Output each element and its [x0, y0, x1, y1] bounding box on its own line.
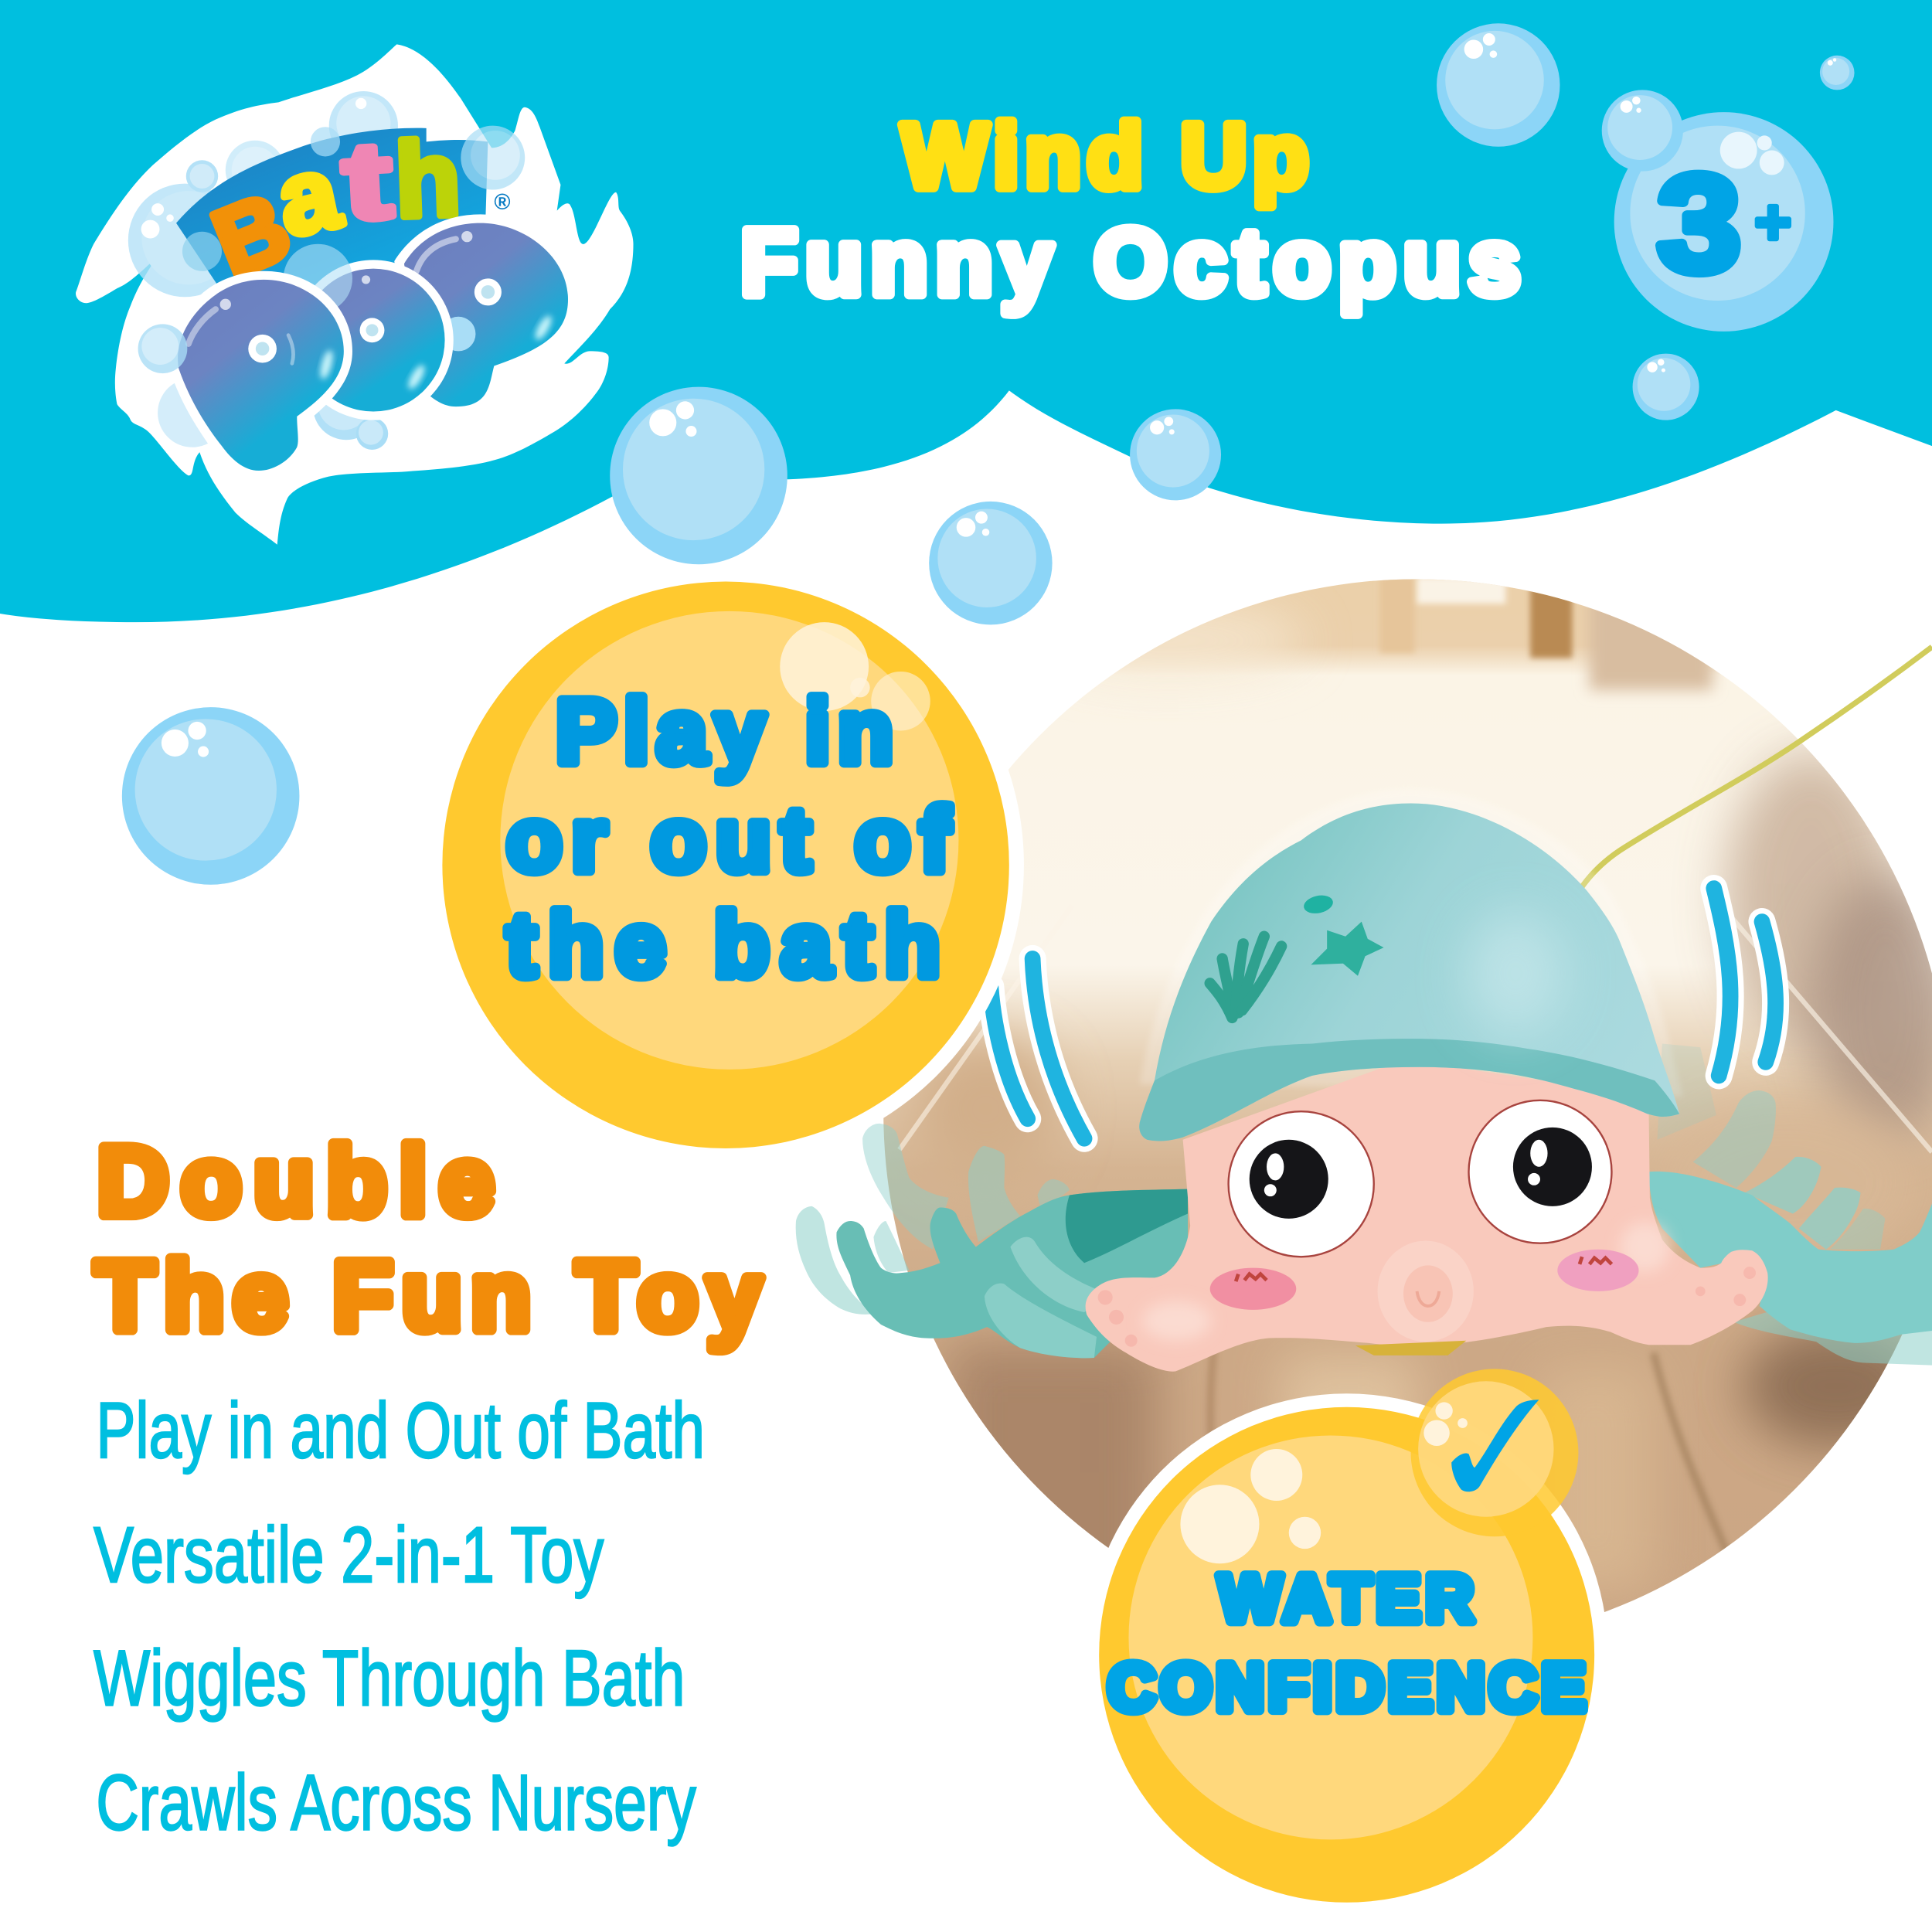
- feature list: Versatile 2-in-1 Toy: [94, 1511, 604, 1599]
- logo word Bath: [199, 119, 462, 298]
- title line: Funny Octopus: Funny Octopus: [740, 209, 1520, 315]
- logo word Bath: B: [199, 172, 304, 298]
- logo bubble: top group: [186, 91, 398, 199]
- logo bubble: small front: [138, 324, 187, 373]
- wheel: [1355, 1341, 1466, 1355]
- feature list: [94, 1386, 705, 1847]
- age badge 3+: [1614, 112, 1833, 332]
- octopus body: [1086, 1060, 1768, 1372]
- heading: double the fun toy: [95, 1127, 761, 1351]
- logo drop: middle: [293, 260, 454, 420]
- check bubble: [1411, 1369, 1578, 1536]
- motion lines left: [991, 958, 1084, 1138]
- wave header: [0, 0, 1932, 622]
- logo bubble: lower small group: [158, 317, 475, 450]
- bubble: above badge: [1602, 90, 1683, 172]
- logo bubble: left large: [128, 184, 241, 297]
- age text: 3: [1657, 146, 1741, 301]
- logo word Bath: h: [393, 120, 462, 240]
- shell print: seashell: [1210, 937, 1281, 1018]
- title line: Wind Up: Wind Up: [902, 105, 1308, 207]
- right tentacles: [1648, 1172, 1932, 1343]
- bubble: wave left large: [610, 387, 787, 564]
- left eye: [1229, 1111, 1374, 1257]
- bubble: wave right: [1130, 409, 1221, 500]
- body glow: [1142, 1223, 1669, 1341]
- tentacle toe pads: [1098, 1267, 1756, 1347]
- right eye: [1469, 1100, 1611, 1243]
- check mark: [1451, 1400, 1539, 1492]
- photo: octopus on wooden floor: [796, 566, 1932, 1663]
- callout text: Play in: [556, 681, 893, 783]
- logo drop: front: [169, 271, 352, 479]
- feature list: Play in and Out of Bath: [96, 1386, 705, 1475]
- logo bubble: mid overlay: [284, 244, 352, 313]
- ghost shell halo: [1140, 788, 1683, 1097]
- shell print: spot: [1302, 893, 1335, 916]
- feature list: Crawls Across Nursery: [96, 1759, 696, 1847]
- bubble: centre: [929, 502, 1053, 624]
- logo white splash: [76, 44, 634, 545]
- logo banner: [176, 128, 488, 332]
- callout text: the bath: [506, 894, 940, 996]
- badge text: WATER: [1219, 1562, 1474, 1636]
- registered mark: ®: [494, 190, 510, 215]
- title: [740, 105, 1520, 315]
- callout text: [506, 681, 951, 996]
- bubble: left: [122, 707, 299, 885]
- mouth: [1378, 1241, 1474, 1342]
- bubble: top right small: [1820, 56, 1855, 90]
- logo word Bath: a: [268, 134, 349, 258]
- rope: [1581, 647, 1932, 889]
- callout text: or out of: [506, 789, 951, 891]
- right cheek: [1557, 1250, 1639, 1291]
- badge text: [1107, 1562, 1586, 1725]
- logo: Bath Pop: [76, 44, 634, 545]
- floor photo: [862, 566, 1932, 1663]
- ghost tentacles: [796, 1043, 1932, 1366]
- bubble: under badge: [1633, 354, 1699, 420]
- badge: water confidence: [1086, 1369, 1608, 1916]
- heading: double the fun toy: The Fun Toy: [95, 1241, 761, 1351]
- feature list: Wiggles Through Bath: [94, 1634, 685, 1723]
- octopus shell: [1139, 804, 1679, 1141]
- heading: double the fun toy: Double: [97, 1127, 494, 1236]
- bubble: top centre right: [1437, 23, 1560, 147]
- motion lines right: [1714, 889, 1776, 1076]
- logo word Bath: t: [340, 119, 395, 243]
- shell print: starfish: [1311, 922, 1383, 976]
- shell shine: [1466, 912, 1565, 1035]
- callout: play in or out of the bath: [427, 566, 1024, 1163]
- logo bubble: overlay top right: [182, 126, 525, 271]
- shell brim: [1139, 1039, 1679, 1141]
- age plus: +: [1754, 186, 1791, 258]
- left cheek: [1210, 1268, 1296, 1310]
- logo drop: back: [394, 214, 577, 415]
- badge text: CONFIDENCE: [1107, 1651, 1586, 1725]
- left tentacles: [836, 1189, 1188, 1358]
